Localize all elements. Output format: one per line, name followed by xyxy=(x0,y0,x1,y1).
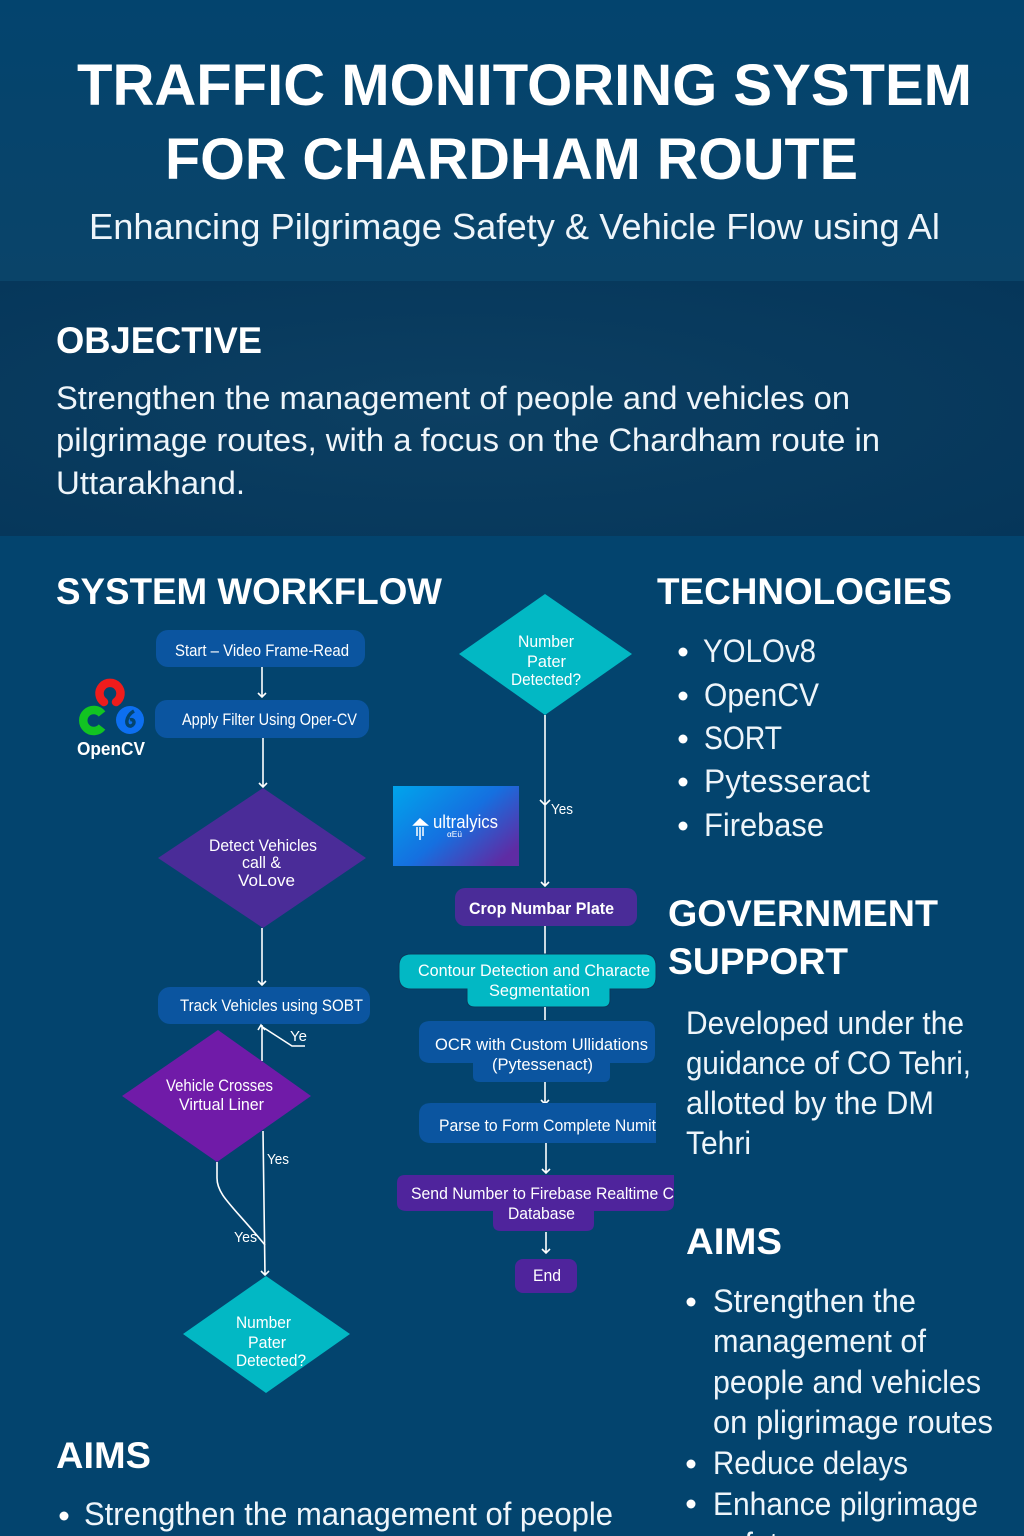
decision: number plate detected xyxy=(183,1276,350,1393)
government support text: Developed under the xyxy=(686,1005,964,1041)
arrow: detect to track xyxy=(258,928,266,985)
government support heading xyxy=(668,893,938,982)
step: parse number: Parse to Form Complete Numit xyxy=(439,1116,656,1135)
icon: ultralytics badge: ultralyics xyxy=(433,812,498,832)
government support heading: SUPPORT xyxy=(668,941,848,982)
step: start xyxy=(156,630,365,667)
technologies list: Pytesseract xyxy=(704,763,870,799)
aims list right: Reduce delays xyxy=(713,1445,908,1481)
government support text: guidance of CO Tehri, xyxy=(686,1045,971,1081)
icon: ultralytics badge xyxy=(393,786,519,866)
step: crop number plate xyxy=(455,888,637,926)
decision: number plate detected: Detected? xyxy=(236,1351,306,1370)
decision: detect vehicles xyxy=(158,788,366,928)
step: send to firebase xyxy=(397,1175,674,1231)
technologies heading: TECHNOLOGIES xyxy=(657,571,952,612)
step: end: End xyxy=(533,1266,561,1285)
technologies list: YOLOv8 xyxy=(703,633,816,669)
decision: vehicle crosses virtual line: Virtual Liner xyxy=(179,1095,264,1114)
title: FOR CHARDHAM ROUTE xyxy=(165,127,858,192)
decision: vehicle crosses virtual line: Vehicle Crosses xyxy=(166,1076,273,1095)
decision: number plate detected top: Pater xyxy=(527,652,566,671)
panel: aims left xyxy=(56,1435,613,1532)
decision: number plate detected: Number xyxy=(236,1313,291,1332)
subtitle: Enhancing Pilgrimage Safety & Vehicle Flow using Al xyxy=(89,206,940,247)
panel: flowchart right column xyxy=(393,594,674,1293)
step: apply filter: Apply Filter Using Oper-CV xyxy=(182,710,358,729)
arrow: detected to crop: Yes xyxy=(551,801,573,818)
connector: contour to OCR xyxy=(544,1007,546,1020)
decision: detect vehicles: VoLove xyxy=(238,871,295,890)
objective text: Uttarakhand. xyxy=(56,465,245,501)
arrow: curved yes branch: Yes xyxy=(234,1229,257,1246)
icon: OpenCV logo xyxy=(77,683,145,759)
aims list right: management of xyxy=(713,1323,926,1359)
panel: flowchart left column xyxy=(77,630,370,1393)
objective heading: OBJECTIVE xyxy=(56,320,262,361)
arrow: filter to detect xyxy=(259,738,267,787)
decision: number plate detected top: Number xyxy=(518,632,574,651)
step: contour detection xyxy=(399,954,656,1007)
heading: system workflow: SYSTEM WORKFLOW xyxy=(56,571,442,612)
aims list right: on pligrimage routes xyxy=(713,1404,993,1440)
technologies list: Firebase xyxy=(704,807,824,843)
step: contour detection: Segmentation xyxy=(489,981,590,1000)
title: TRAFFIC MONITORING SYSTEM xyxy=(77,53,972,118)
aims list right: Strengthen the xyxy=(713,1283,916,1319)
step: OCR xyxy=(419,1021,655,1082)
step: parse number xyxy=(419,1103,656,1143)
arrow: loop back to track xyxy=(258,1025,307,1061)
arrow: start to filter xyxy=(258,667,266,697)
header band xyxy=(0,0,1024,281)
step: send to firebase: Database xyxy=(508,1204,575,1223)
decision: detect vehicles: call & xyxy=(242,853,282,872)
aims list right: Enhance pilgrimage xyxy=(713,1486,978,1522)
step: crop number plate: Crop Numbar Plate xyxy=(469,899,614,918)
aims list right: people and vehicles xyxy=(713,1364,981,1400)
government support text xyxy=(686,1005,971,1161)
step: start: Start – Video Frame-Read xyxy=(175,641,349,660)
technologies list xyxy=(678,633,870,843)
government support text: allotted by the DM xyxy=(686,1085,934,1121)
arrow: OCR to parse xyxy=(541,1082,549,1104)
step: OCR: OCR with Custom Ullidations xyxy=(435,1035,648,1054)
technologies list: SORT xyxy=(704,720,782,756)
aims heading left: AIMS xyxy=(56,1435,151,1476)
arrow: send to end xyxy=(542,1232,550,1253)
arrow: yes branch xyxy=(261,1131,289,1275)
technologies list: OpenCV xyxy=(704,677,820,713)
connector: crop to contour xyxy=(544,926,546,954)
aims list left: Strengthen the management of people xyxy=(84,1496,613,1532)
panel: objective xyxy=(0,281,1024,536)
arrow: parse to send xyxy=(542,1143,550,1173)
step: contour detection: Contour Detection and Characte xyxy=(418,961,650,980)
icon: ultralytics badge: αEü xyxy=(447,830,462,839)
government support heading: GOVERNMENT xyxy=(668,893,938,934)
step: track vehicles xyxy=(158,987,370,1024)
arrow: loop back to track: Ye xyxy=(290,1028,307,1045)
objective text: pilgrimage routes, with a focus on the Chardham route in xyxy=(56,422,880,458)
step: apply filter xyxy=(155,700,369,738)
arrow: yes branch: Yes xyxy=(267,1151,289,1168)
step: send to firebase: Send Number to Firebase Realtime C xyxy=(411,1184,674,1203)
step: track vehicles: Track Vehicles using SOBT xyxy=(180,996,363,1015)
panel: government support xyxy=(668,893,971,1161)
icon: OpenCV logo: OpenCV xyxy=(77,739,145,759)
decision: number plate detected top: Detected? xyxy=(511,670,581,689)
government support text: Tehri xyxy=(686,1125,751,1161)
panel: aims right xyxy=(686,1221,993,1536)
objective text: Strengthen the management of people and vehicles on xyxy=(56,380,850,416)
aims list right xyxy=(686,1283,993,1536)
aims heading right: AIMS xyxy=(686,1221,782,1262)
panel: technologies xyxy=(657,571,952,843)
decision: detect vehicles: Detect Vehicles xyxy=(209,836,317,855)
title xyxy=(77,53,972,192)
step: end xyxy=(515,1259,577,1293)
step: OCR: (Pytessenact) xyxy=(492,1055,593,1074)
decision: number plate detected top xyxy=(459,594,632,715)
arrow: detected to crop xyxy=(540,715,573,886)
decision: number plate detected: Pater xyxy=(248,1333,286,1352)
decision: vehicle crosses virtual line xyxy=(122,1030,311,1162)
objective text xyxy=(56,380,880,501)
arrow: curved yes branch xyxy=(217,1162,265,1246)
